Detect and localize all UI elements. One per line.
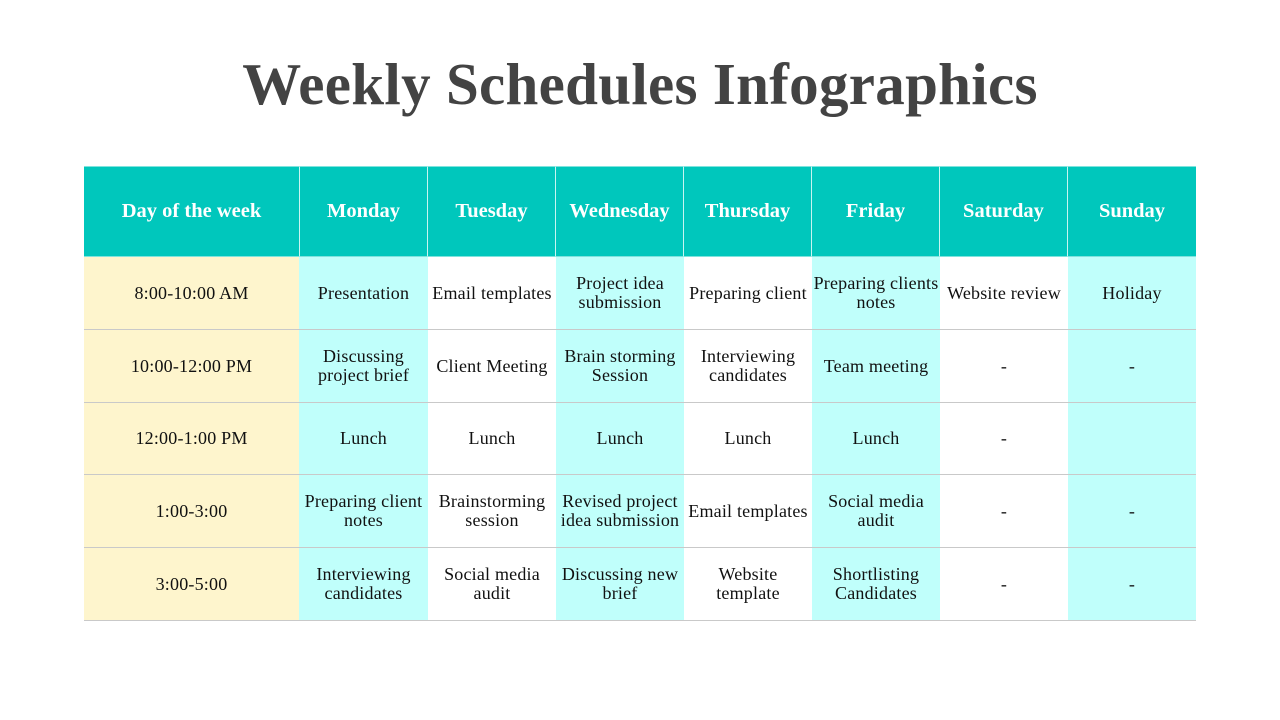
header: Friday: Friday bbox=[846, 200, 905, 222]
Wednesday cell bbox=[556, 548, 684, 621]
Friday cell: Candidates bbox=[835, 583, 917, 603]
Wednesday cell: Session bbox=[592, 365, 648, 385]
Monday cell bbox=[299, 475, 428, 548]
Friday cell bbox=[812, 403, 940, 475]
Tuesday cell: audit bbox=[474, 583, 510, 603]
Wednesday cell bbox=[556, 257, 684, 330]
title: Weekly Schedules Infographics bbox=[242, 51, 1038, 117]
Thursday cell bbox=[701, 346, 795, 385]
Monday cell bbox=[299, 257, 428, 330]
Friday cell: notes bbox=[856, 292, 896, 312]
Wednesday cell: Revised project bbox=[562, 491, 678, 511]
row: 12:00-1:00 PM bbox=[84, 403, 1196, 475]
Thursday cell: Website bbox=[719, 564, 777, 584]
Monday cell: candidates bbox=[325, 583, 402, 603]
time slot bbox=[84, 475, 299, 548]
header: Saturday bbox=[939, 166, 1067, 257]
Monday cell bbox=[299, 403, 428, 475]
Wednesday cell: Brain storming bbox=[564, 346, 676, 366]
Tuesday cell: Lunch bbox=[468, 428, 515, 448]
Friday cell bbox=[812, 475, 940, 548]
Saturday cell: Website review bbox=[947, 282, 1061, 302]
schedule table bbox=[84, 166, 1196, 621]
row: 1:00-3:00 bbox=[84, 475, 1196, 548]
Thursday cell: Email templates bbox=[688, 500, 808, 520]
Wednesday cell bbox=[556, 475, 684, 548]
header row bbox=[84, 166, 1196, 257]
Thursday cell bbox=[716, 564, 780, 603]
Wednesday cell: Lunch bbox=[596, 428, 643, 448]
time slot bbox=[84, 548, 299, 621]
Thursday cell: Preparing client bbox=[689, 282, 807, 302]
Friday cell: Shortlisting bbox=[833, 564, 919, 584]
time slot bbox=[84, 330, 299, 403]
Saturday cell: - bbox=[1001, 500, 1007, 520]
header: Monday: Monday bbox=[327, 200, 400, 222]
Friday cell bbox=[812, 257, 940, 330]
header: day of the week: Day of the week bbox=[122, 200, 261, 222]
header: Saturday: Saturday bbox=[963, 200, 1044, 222]
header: Monday bbox=[299, 166, 427, 257]
Wednesday cell bbox=[556, 330, 684, 403]
Sunday cell bbox=[1068, 330, 1196, 403]
Wednesday cell: submission bbox=[578, 292, 662, 312]
row: 10:00-12:00 PM bbox=[84, 330, 1196, 403]
Thursday cell: Lunch bbox=[724, 428, 771, 448]
Monday cell: Interviewing bbox=[316, 564, 411, 584]
Sunday cell bbox=[1068, 257, 1196, 330]
Tuesday cell bbox=[444, 564, 540, 603]
Monday cell: Preparing client bbox=[305, 491, 422, 511]
Saturday cell: - bbox=[1001, 428, 1007, 448]
Sunday cell: - bbox=[1129, 574, 1135, 594]
Tuesday cell: Client Meeting bbox=[436, 356, 548, 376]
Saturday cell: - bbox=[1001, 574, 1007, 594]
row: 8:00-10:00 AM bbox=[84, 257, 1196, 330]
Tuesday cell: Social media bbox=[444, 564, 540, 584]
header: Wednesday bbox=[555, 166, 683, 257]
Friday cell: audit bbox=[858, 510, 894, 530]
Sunday cell bbox=[1068, 548, 1196, 621]
Wednesday cell bbox=[556, 403, 684, 475]
header: Thursday: Thursday bbox=[705, 200, 790, 222]
header: day of the week bbox=[84, 166, 299, 257]
header: Wednesday: Wednesday bbox=[569, 200, 670, 222]
header: Friday bbox=[811, 166, 939, 257]
Wednesday cell: idea submission bbox=[561, 510, 679, 530]
Thursday cell: Interviewing bbox=[701, 346, 795, 366]
header: Thursday bbox=[683, 166, 811, 257]
time slot bbox=[84, 403, 299, 475]
Wednesday cell: Project idea bbox=[576, 273, 664, 293]
Tuesday cell: session bbox=[465, 510, 519, 530]
Friday cell: Social media bbox=[828, 491, 924, 511]
Monday cell: Lunch bbox=[340, 428, 387, 448]
time slot bbox=[84, 257, 299, 330]
time slot: 1:00-3:00 bbox=[156, 500, 227, 520]
Monday cell: project brief bbox=[318, 365, 409, 385]
Wednesday cell: brief bbox=[602, 583, 637, 603]
Thursday cell: candidates bbox=[709, 365, 787, 385]
header: Tuesday: Tuesday bbox=[455, 200, 528, 222]
Thursday cell: template bbox=[716, 583, 780, 603]
Friday cell: Lunch bbox=[852, 428, 899, 448]
Monday cell bbox=[299, 548, 428, 621]
Tuesday cell: Email templates bbox=[432, 282, 552, 302]
time slot: 12:00-1:00 PM bbox=[135, 428, 248, 448]
header: Sunday bbox=[1067, 166, 1196, 257]
Sunday cell (empty) bbox=[1068, 403, 1196, 475]
Sunday cell: - bbox=[1129, 356, 1135, 376]
Friday cell: Preparing clients bbox=[814, 273, 938, 293]
Friday cell bbox=[812, 330, 940, 403]
Friday cell bbox=[812, 548, 940, 621]
Monday cell bbox=[299, 330, 428, 403]
Sunday cell: - bbox=[1129, 500, 1135, 520]
row: 3:00-5:00 bbox=[84, 548, 1196, 621]
header: Sunday: Sunday bbox=[1099, 200, 1165, 222]
Monday cell: notes bbox=[344, 510, 383, 530]
Friday cell: Team meeting bbox=[824, 356, 928, 376]
Tuesday cell bbox=[439, 491, 545, 530]
Saturday cell: - bbox=[1001, 356, 1007, 376]
Monday cell: Discussing bbox=[323, 346, 404, 366]
header: Tuesday bbox=[427, 166, 555, 257]
Tuesday cell: Brainstorming bbox=[439, 491, 545, 511]
Sunday cell bbox=[1068, 475, 1196, 548]
Sunday cell: Holiday bbox=[1102, 282, 1162, 302]
Wednesday cell: Discussing new bbox=[562, 564, 678, 584]
Monday cell: Presentation bbox=[318, 282, 409, 302]
time slot: 10:00-12:00 PM bbox=[131, 356, 252, 376]
time slot: 3:00-5:00 bbox=[156, 574, 227, 594]
time slot: 8:00-10:00 AM bbox=[134, 282, 249, 302]
